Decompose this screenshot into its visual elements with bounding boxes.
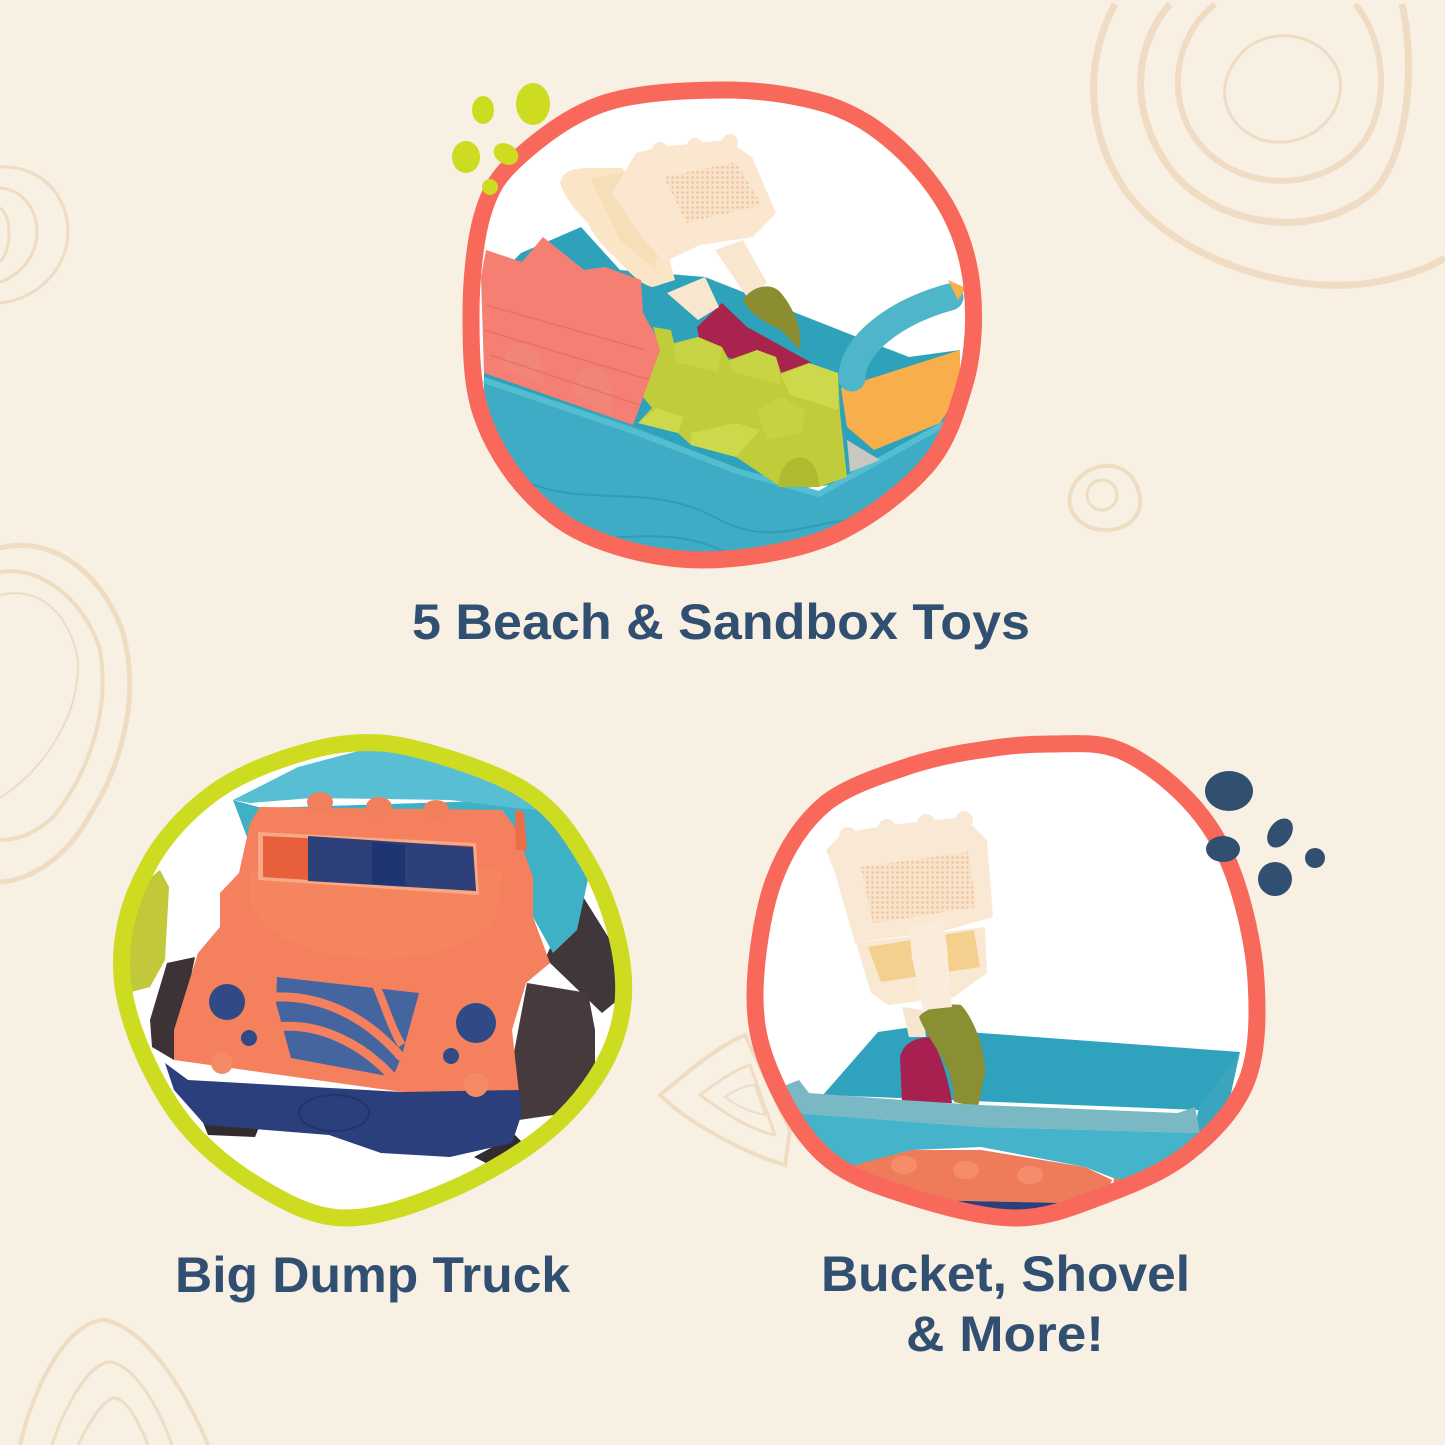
red handle — [697, 303, 812, 380]
bumper — [165, 1063, 522, 1157]
windshield — [258, 832, 479, 895]
decorative contour rings: left top — [0, 167, 68, 303]
border — [122, 743, 624, 1218]
truck bed side — [233, 800, 590, 953]
rear wheel — [547, 898, 616, 1013]
decorative contour rings: left middle — [0, 545, 130, 882]
green castle — [130, 870, 169, 992]
panel: bucket and shovel — [745, 735, 1325, 1362]
grille — [276, 977, 419, 1077]
label: Big Dump Truck — [175, 1247, 570, 1303]
exhaust pipe — [515, 810, 527, 850]
left wheel — [150, 957, 195, 1060]
cab — [174, 807, 550, 1093]
headlights — [209, 984, 245, 1020]
bucket front — [795, 1113, 1199, 1183]
photo area: bucket — [764, 752, 1248, 1210]
decorative contour rings: center right — [1069, 466, 1140, 530]
olive handle — [919, 1005, 985, 1107]
decorative triangle rings — [660, 1035, 790, 1165]
photo area: sandbox toys — [480, 98, 965, 552]
lower tyres — [203, 1122, 521, 1163]
wagon interior — [484, 227, 960, 500]
orange cab top — [847, 1150, 1112, 1203]
bucket right side — [1188, 1052, 1240, 1163]
scoop — [560, 168, 675, 287]
green castle — [638, 327, 847, 487]
sieve head — [826, 811, 993, 943]
border — [471, 90, 974, 560]
label: & More! — [906, 1306, 1104, 1362]
pink castle — [481, 237, 662, 425]
bucket rim — [781, 1080, 1200, 1133]
red handle — [900, 1037, 952, 1103]
label: Bucket, Shovel — [821, 1246, 1190, 1302]
sieve head — [612, 134, 776, 262]
icon: green dots — [452, 83, 550, 195]
decorative contour rings: bottom left — [20, 1320, 208, 1445]
orange shovel — [841, 350, 960, 450]
teal rake — [852, 297, 950, 378]
sieve mesh — [664, 162, 762, 223]
olive handle — [743, 286, 800, 350]
icon: blue dots — [1205, 771, 1325, 896]
logo badge — [299, 1095, 369, 1131]
photo area: truck — [130, 751, 616, 1210]
right wheel — [512, 983, 595, 1120]
fog lamps — [211, 1052, 233, 1074]
sieve handle — [909, 920, 952, 1010]
cream handles — [667, 277, 719, 320]
panel: beach and sandbox toys — [412, 80, 1030, 650]
lower handle — [902, 1007, 926, 1037]
truck bed canopy — [233, 751, 536, 810]
border — [755, 744, 1257, 1218]
bucket interior — [823, 1028, 1240, 1110]
sieve mesh — [861, 852, 976, 923]
label: 5 Beach & Sandbox Toys — [412, 594, 1030, 650]
decorative contour rings: top right — [1094, 4, 1445, 285]
cab bumps — [307, 792, 333, 808]
label — [821, 1246, 1190, 1362]
wagon front wall — [484, 377, 940, 552]
scoop — [856, 927, 987, 1005]
panel: big dump truck — [110, 730, 635, 1303]
